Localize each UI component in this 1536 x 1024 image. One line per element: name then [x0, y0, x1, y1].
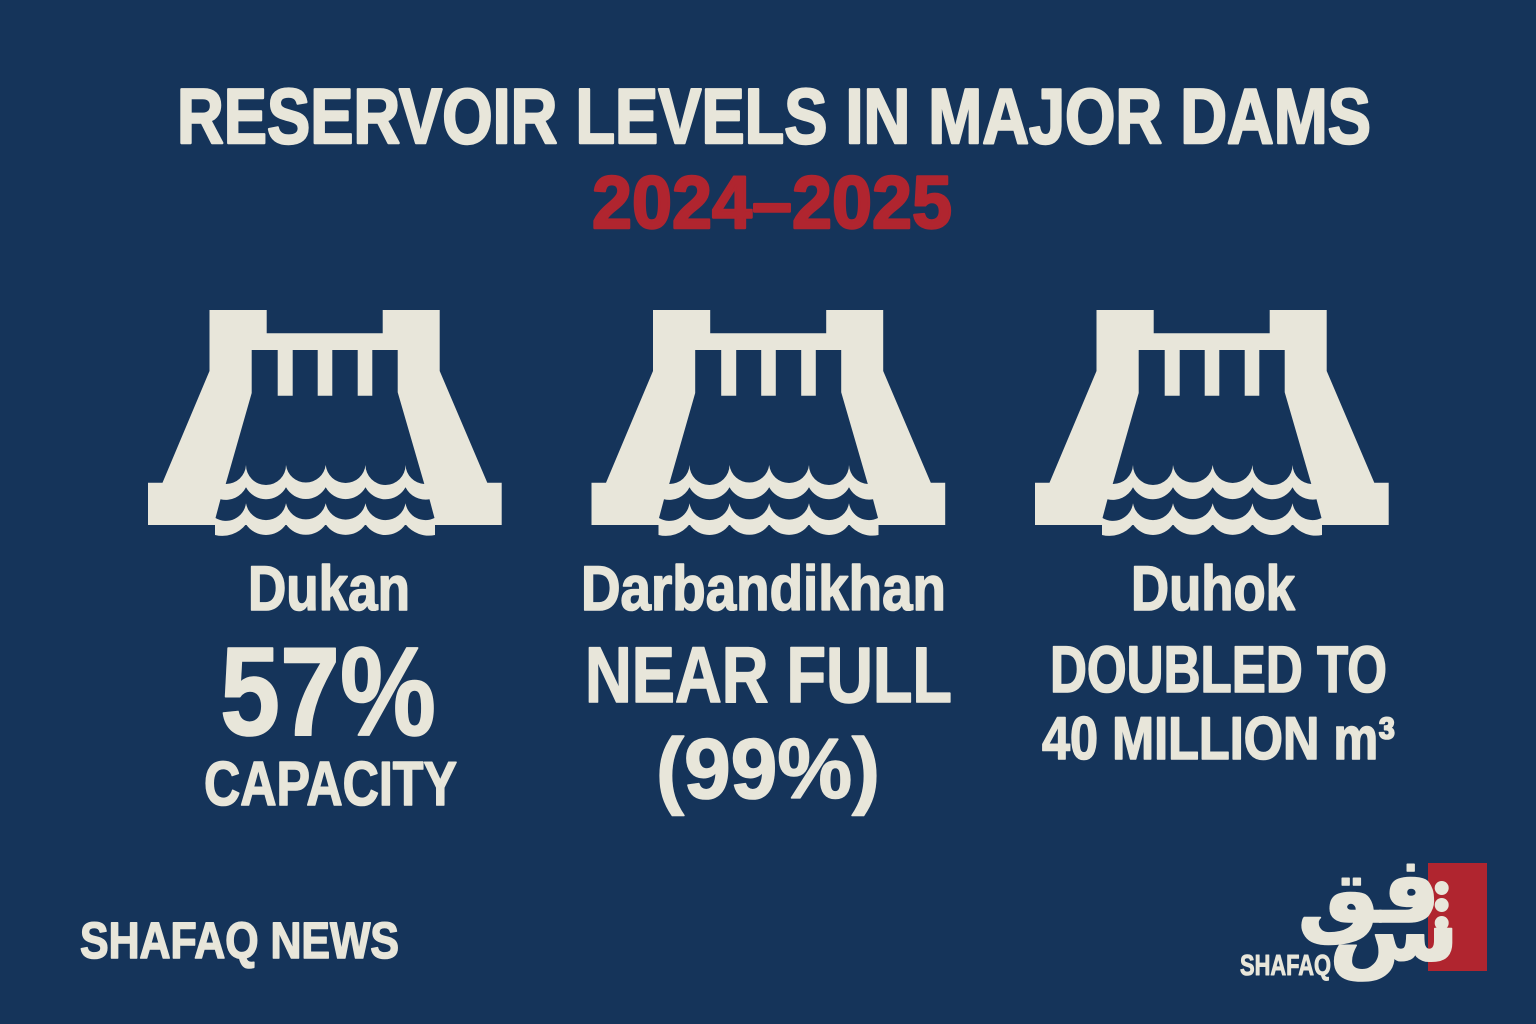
stat label: CAPACITY	[204, 750, 457, 819]
logo wordmark: SHAFAQ	[1240, 950, 1331, 982]
dam name: Dukan	[248, 554, 410, 624]
logo: Shafaq	[1240, 837, 1487, 982]
panel: Darbandikhan	[581, 310, 952, 817]
stat: 40 million cubic metres: 40 MILLION m³	[1042, 705, 1395, 772]
stat: 99%: (99%)	[656, 722, 880, 817]
stat: 57%: 57%	[220, 621, 436, 762]
footer credit: SHAFAQ NEWS	[80, 912, 399, 969]
icon: dam with water	[148, 310, 502, 536]
logo dots	[1435, 881, 1449, 930]
dam name: Darbandikhan	[581, 554, 946, 624]
stat: near full: NEAR FULL	[585, 630, 952, 719]
stat: doubled to: DOUBLED TO	[1050, 632, 1387, 706]
icon: dam with water	[592, 310, 945, 536]
logo arabic upper word: فق	[1297, 837, 1441, 945]
panel: Duhok	[1035, 310, 1395, 772]
subtitle: years: 2024–2025	[592, 161, 952, 244]
logo red block	[1428, 863, 1487, 971]
logo arabic lower letter: س	[1329, 881, 1459, 981]
dam name: Duhok	[1131, 554, 1296, 624]
icon: dam with water	[1035, 310, 1389, 536]
panel: Dukan	[148, 310, 502, 819]
